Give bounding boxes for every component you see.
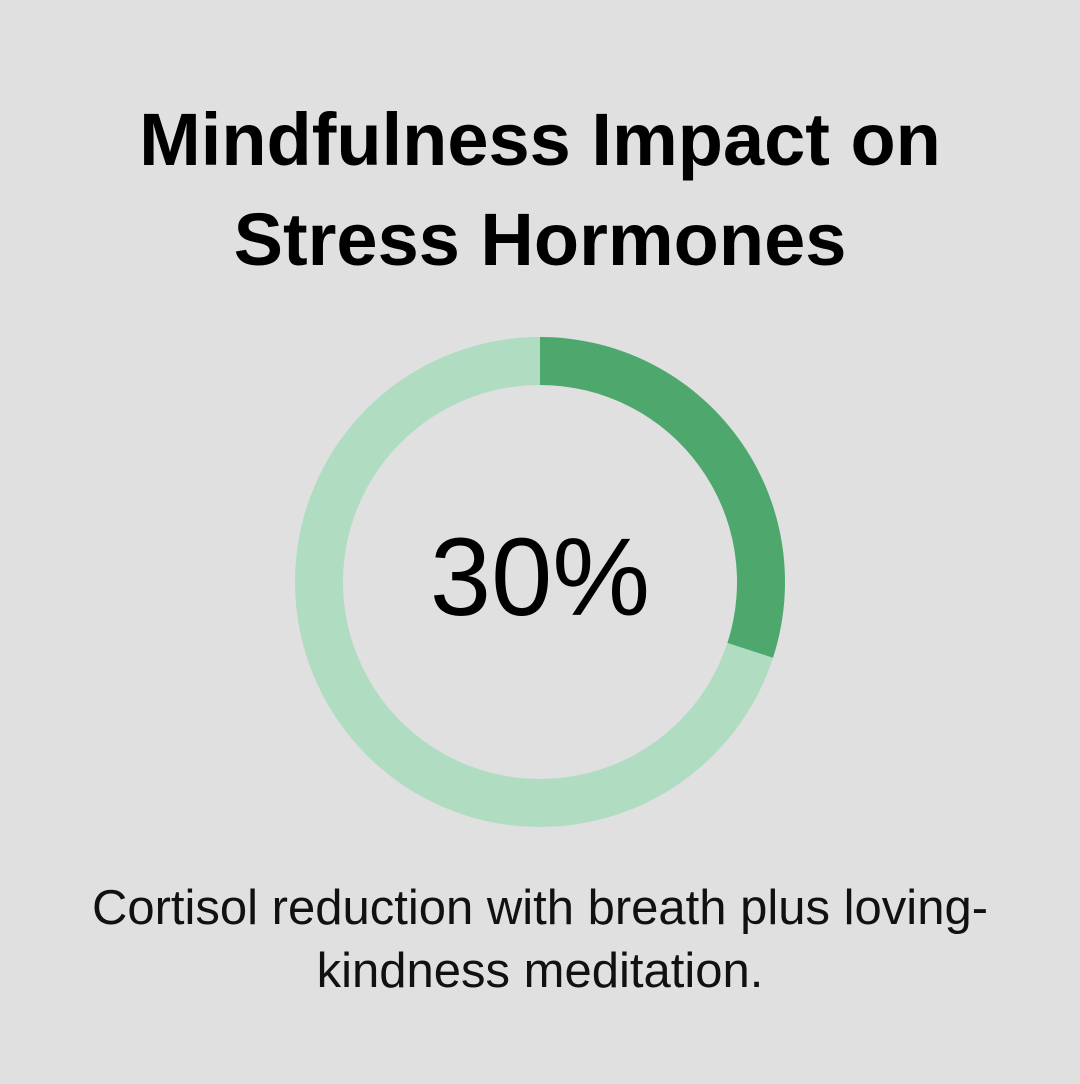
center value: 30% [430, 516, 650, 639]
title: Mindfulness Impact on [139, 98, 941, 181]
ring value arc 30% [540, 337, 785, 658]
ring background [319, 361, 761, 803]
caption: kindness meditation. [317, 944, 763, 998]
caption: Cortisol reduction with breath plus loving- [92, 881, 988, 935]
title: Stress Hormones [234, 198, 846, 281]
caption [92, 881, 988, 998]
title [139, 98, 941, 281]
